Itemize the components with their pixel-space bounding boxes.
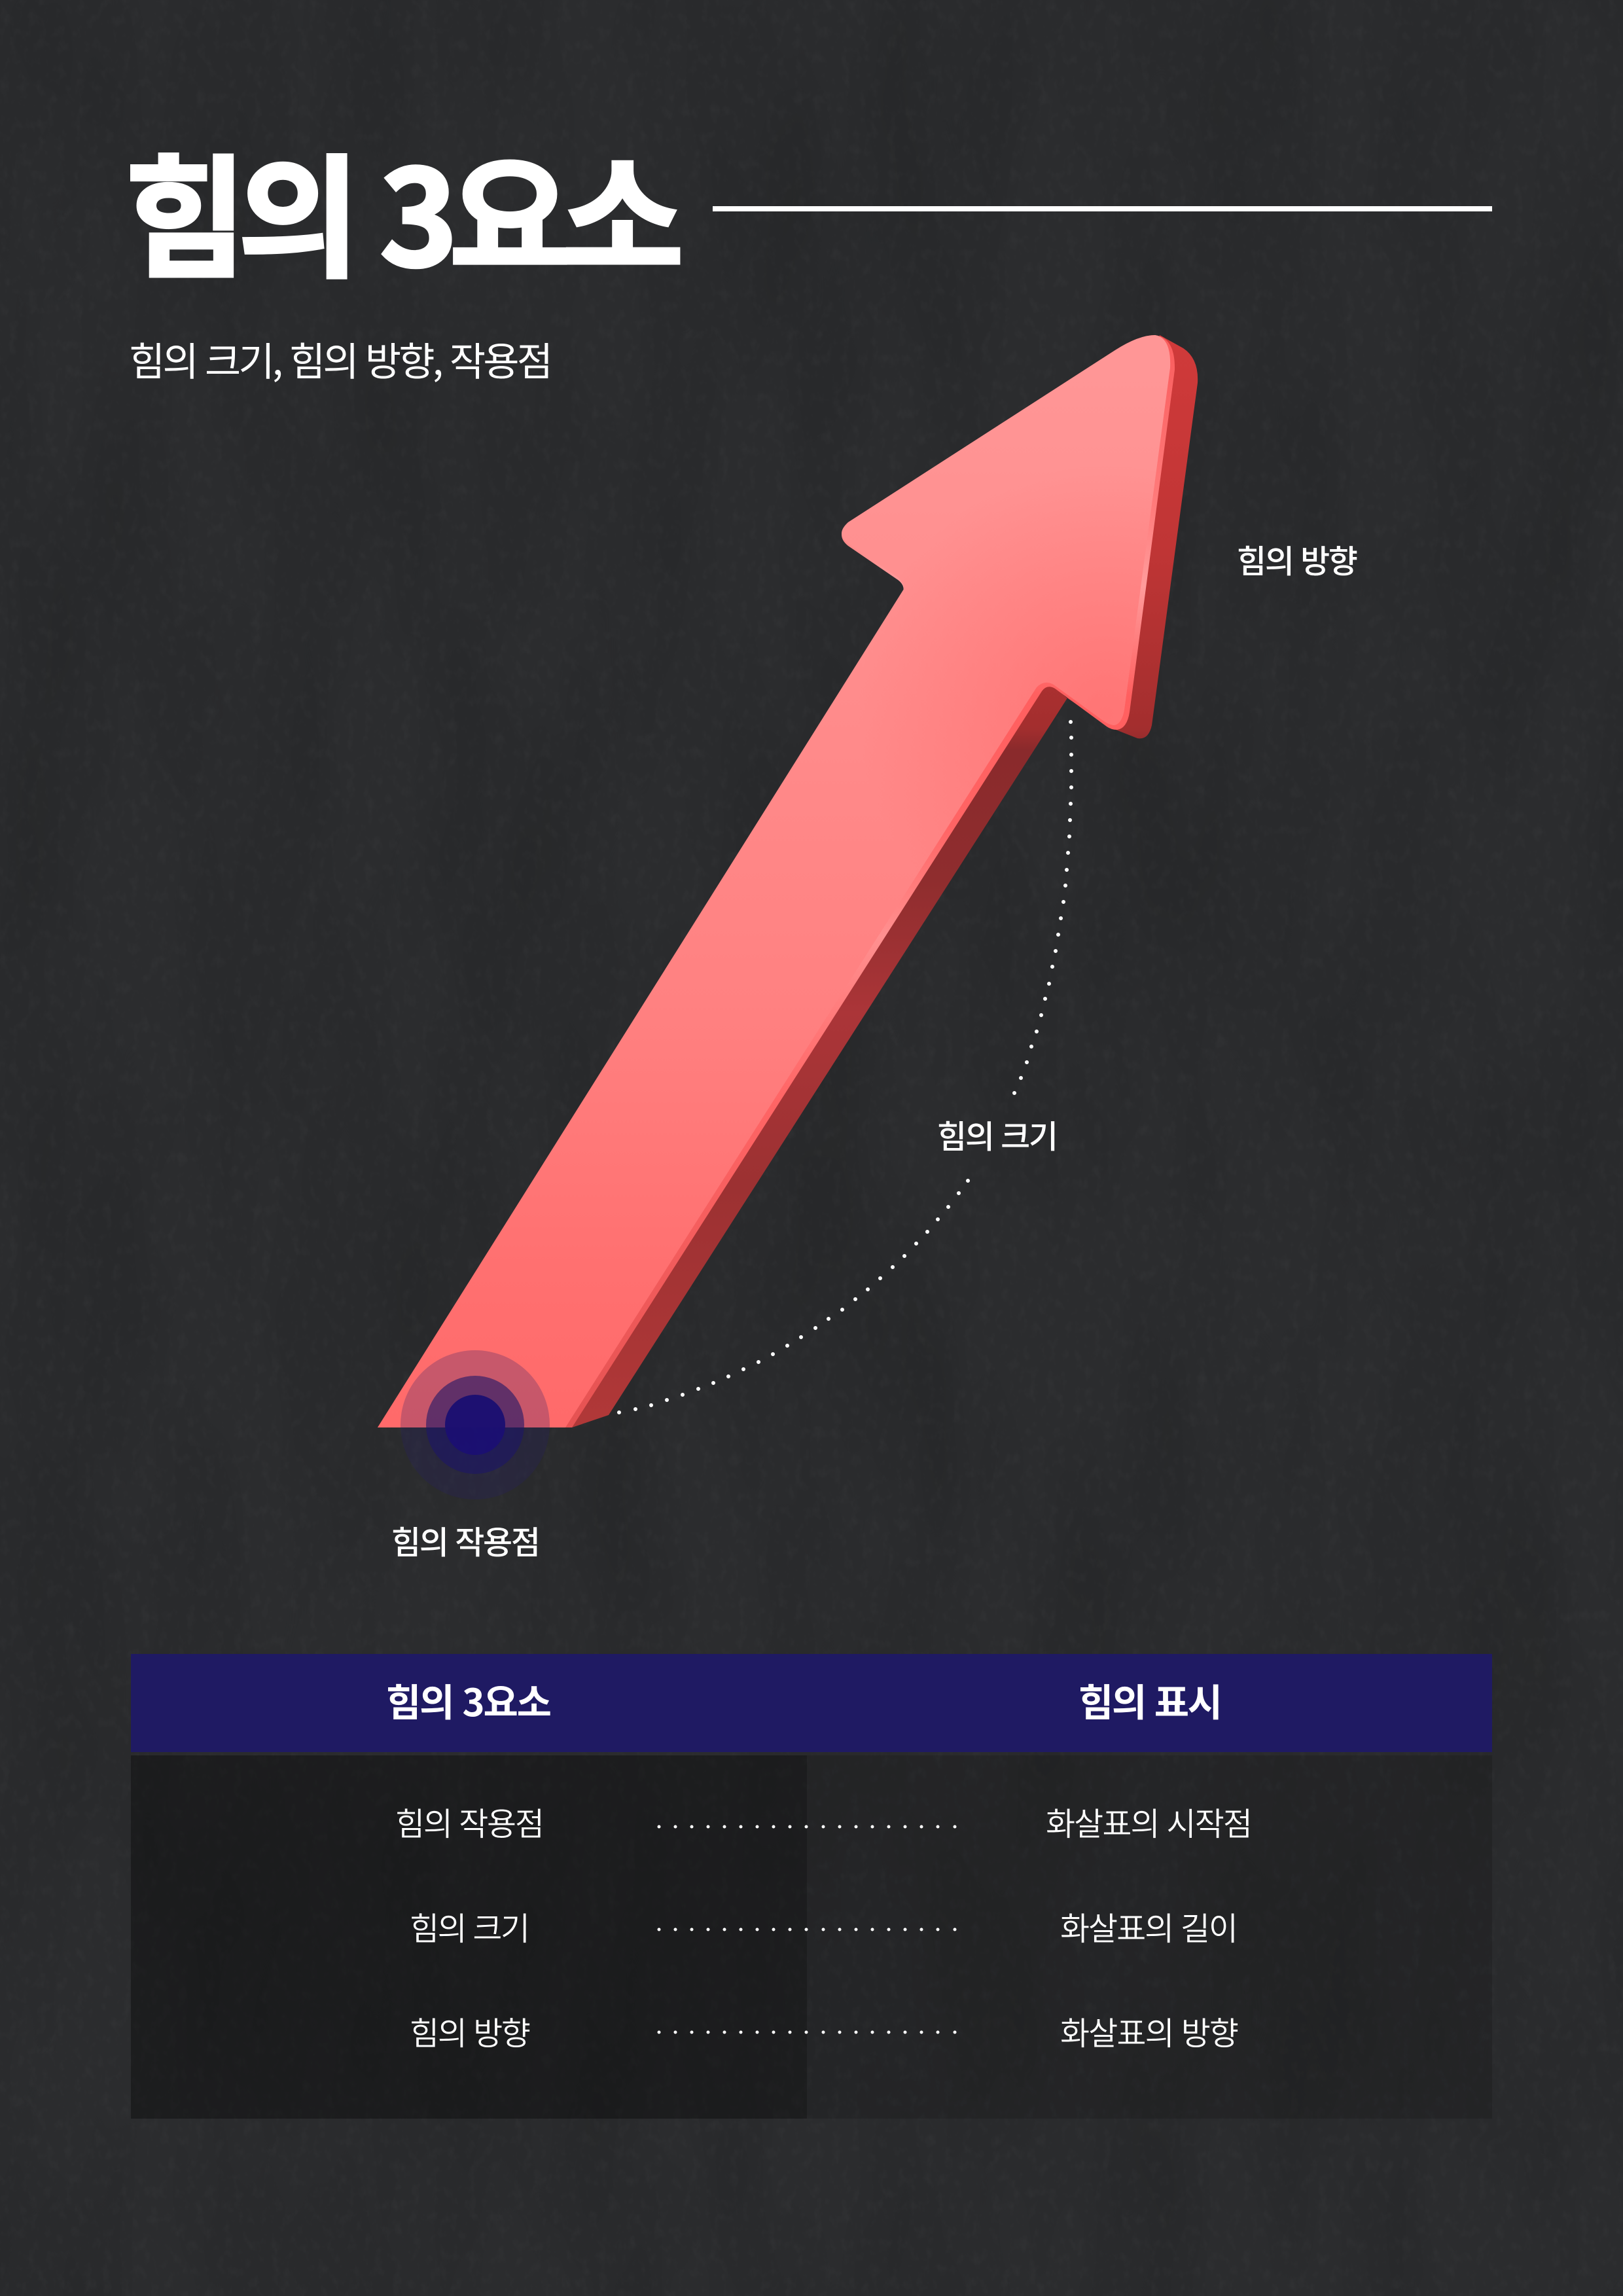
- label: magnitude of force: 힘의 크기: [937, 1111, 1058, 1158]
- row 1 right text: 화살표의 시작점: [1046, 1799, 1253, 1845]
- arrow side extrusion: [563, 335, 1198, 1427]
- table right column panel: [807, 1755, 1492, 2119]
- header: force notation: 힘의 표시: [1079, 1672, 1222, 1727]
- title: 힘의 3요소: [125, 113, 684, 304]
- label: point of application: 힘의 작용점: [391, 1517, 541, 1564]
- row 2 left text: 힘의 크기: [410, 1903, 530, 1950]
- table: three elements of force: [131, 1654, 1492, 2119]
- label: direction of force: 힘의 방향: [1237, 536, 1358, 583]
- row 3 right text: 화살표의 방향: [1060, 2008, 1239, 2054]
- dotted arc: force magnitude, lower: [619, 1181, 968, 1412]
- title rule: [713, 206, 1492, 211]
- subtitle: 힘의 크기, 힘의 방향, 작용점: [129, 331, 553, 387]
- table header bar: [131, 1654, 1492, 1752]
- row 3 left text: 힘의 방향: [410, 2008, 531, 2054]
- arrow front face: [378, 335, 1170, 1427]
- row 1 left text: 힘의 작용점: [395, 1799, 544, 1845]
- row 1 leader dots: [659, 1825, 955, 1829]
- table left column panel: [131, 1755, 807, 2119]
- arrow: 3D red force arrow: [378, 335, 1198, 1427]
- row 2 right text: 화살표의 길이: [1060, 1903, 1238, 1950]
- arrow bevel edge: [378, 335, 1175, 1427]
- row 3 leader dots: [659, 2030, 955, 2034]
- header: three elements: 힘의 3요소: [386, 1672, 552, 1727]
- dotted arc: force magnitude, upper: [1014, 722, 1071, 1093]
- arrow face shading: [378, 335, 1170, 1427]
- icon: point of application concentric circles: [401, 1350, 550, 1499]
- row 2 leader dots: [659, 1928, 955, 1931]
